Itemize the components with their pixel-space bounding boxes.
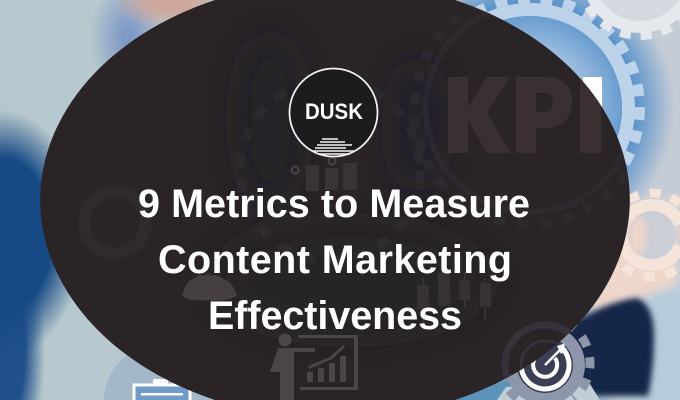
watermark: candlesticks xyxy=(417,272,491,323)
icon: clipboard xyxy=(134,379,190,400)
gear: light gear behind target xyxy=(497,384,600,400)
hand xyxy=(590,200,678,312)
sleeve xyxy=(530,298,654,396)
title: Content Marketing xyxy=(158,238,512,282)
watermark: KPI lettering xyxy=(448,77,601,153)
gear: KPI blue gear xyxy=(420,0,640,218)
title: Effectiveness xyxy=(208,294,462,338)
watermark: faint chart ring xyxy=(84,191,146,253)
logo: DUSK xyxy=(290,68,378,156)
gear: behind clipboard xyxy=(104,345,214,400)
icon: target gear xyxy=(500,318,590,400)
title: 9 Metrics to Measure xyxy=(138,182,530,226)
gear: top right light gear xyxy=(579,0,680,36)
watermarks clipped inside ellipse xyxy=(182,4,628,400)
logo: brush stroke xyxy=(313,139,354,154)
watermark: gears in ellipse xyxy=(237,4,628,245)
title xyxy=(138,182,530,338)
watermark: dark shading inside ellipse xyxy=(405,92,431,158)
watermark: nodes under logo xyxy=(292,158,336,174)
logo: DUSK: DUSK xyxy=(305,99,363,124)
watermark: bars under logo xyxy=(306,163,357,191)
watermark: target xyxy=(502,322,572,380)
watermark: people group xyxy=(182,274,237,300)
gear: right small gear on hand xyxy=(610,193,680,277)
watermark: presenter with chart xyxy=(270,334,358,400)
